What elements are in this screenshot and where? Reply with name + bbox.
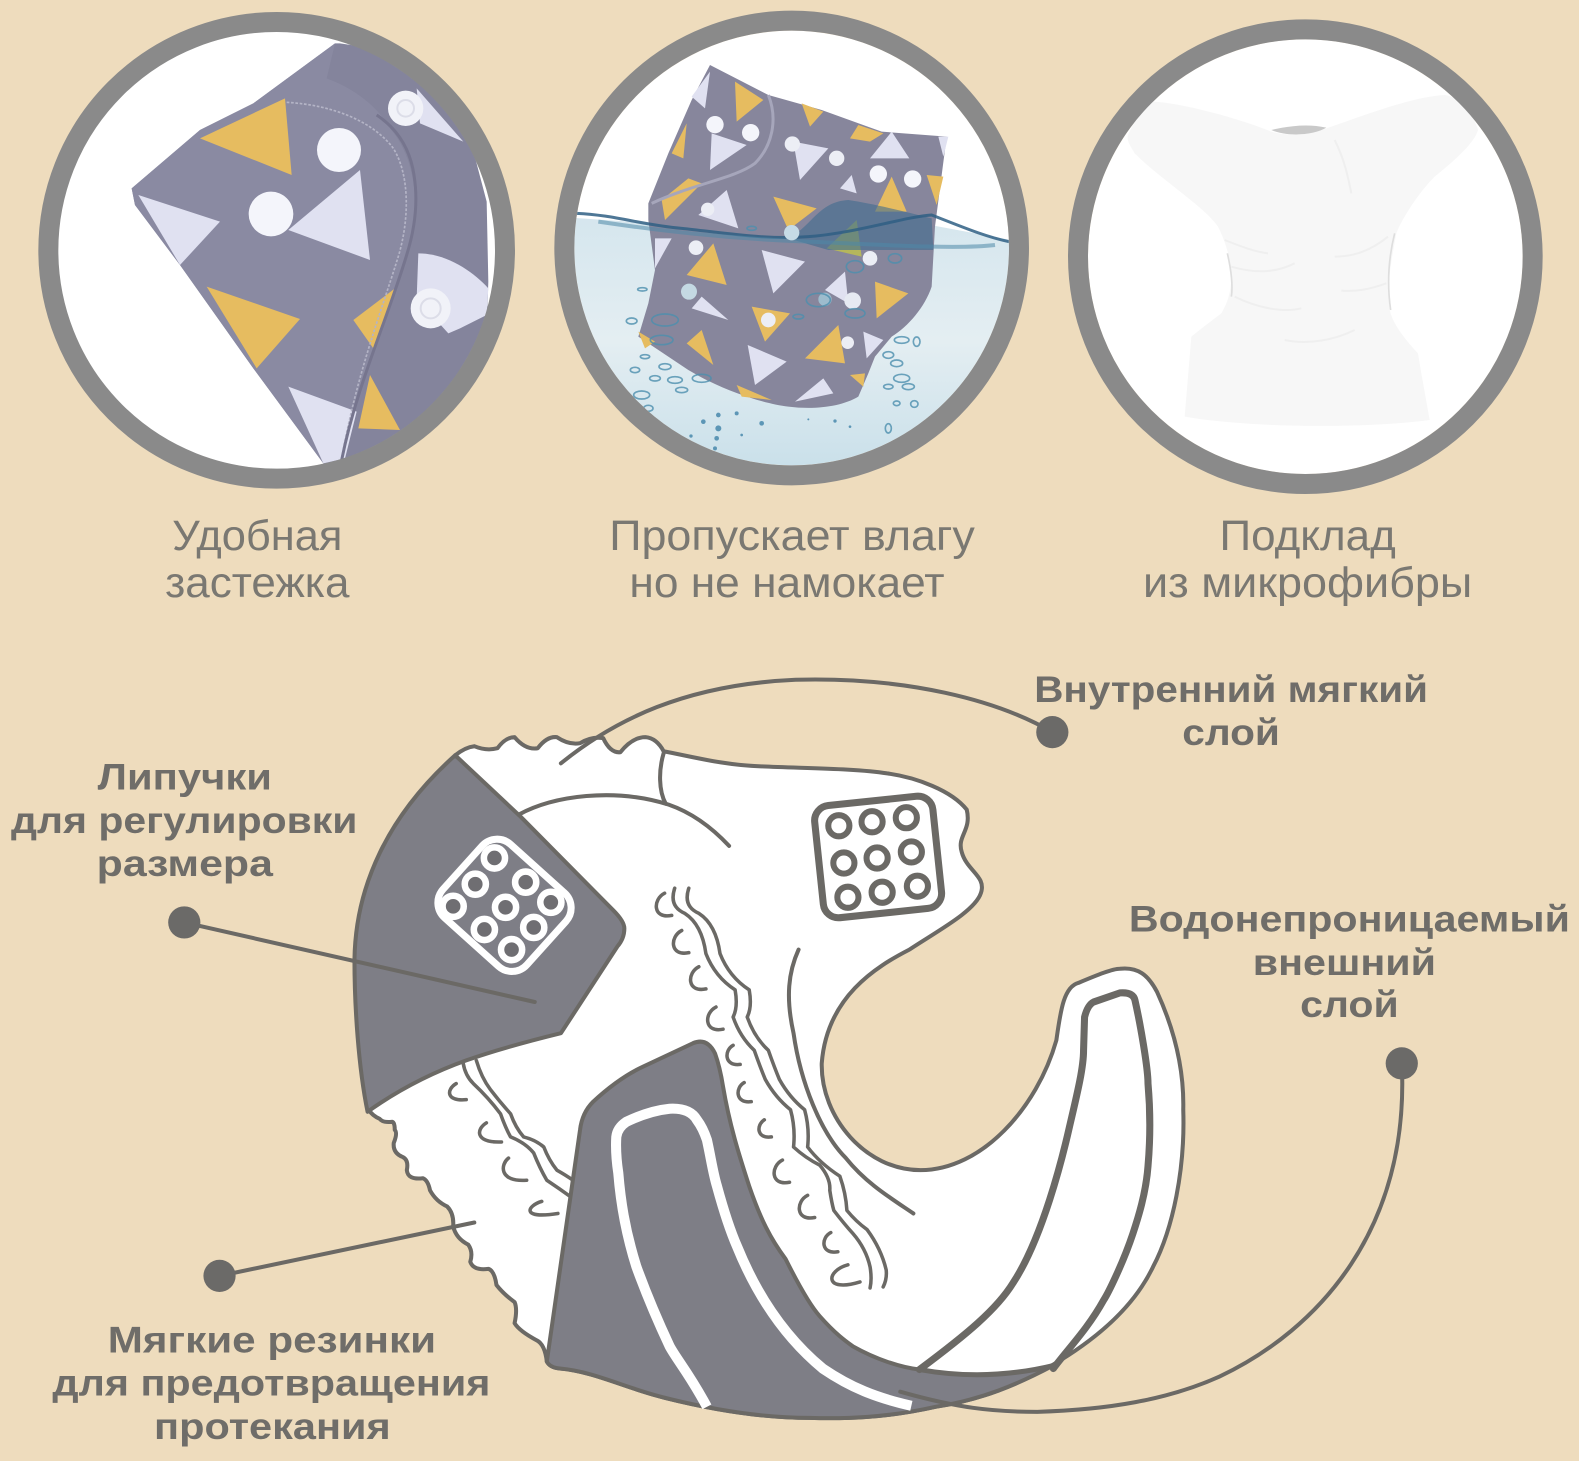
label: inner soft layer [1034,668,1428,753]
label: velcro size adjustment: для регулировки [11,799,357,841]
caption: convenient fastener [165,512,350,606]
snap panel on tab [430,831,579,980]
right leg thick seam [919,993,1150,1370]
grey crotch panel [547,1042,1053,1418]
diagram: diaper illustration [354,737,1183,1418]
label: soft elastics: протекания [154,1405,391,1447]
label: soft elastics: для предотвращения [52,1362,490,1404]
dot: elastic [203,1260,236,1292]
caption: microfibre liner [1143,512,1472,606]
caption: lets moisture through: но не намокает [629,559,945,606]
caption: microfibre liner: Подклад [1220,512,1396,559]
inner seam lines [519,753,913,1213]
snap panel on waist [813,795,943,919]
leader line: fastening tab [184,922,535,1002]
leader line: elastic [220,1223,474,1276]
leader line: outer layer [900,1063,1402,1412]
label: soft elastics [52,1318,490,1447]
label: waterproof outer layer: слой [1300,983,1399,1025]
label: velcro size adjustment [11,756,357,884]
panel: water resistance photo [555,21,1029,493]
diaper white body [369,737,1183,1418]
elastic stitching lower [450,1060,573,1215]
panel: snap fastener photo [48,22,505,482]
elastic stitching upper [656,888,886,1288]
dot: fastening tab [168,906,200,939]
label: velcro size adjustment: размера [97,842,273,884]
caption: convenient fastener: Удобная [172,512,342,559]
dot: outer layer [1386,1047,1418,1080]
white inset band [616,1109,911,1407]
caption: convenient fastener: застежка [165,559,350,606]
bottom seam arc [919,1366,1053,1375]
label: waterproof outer layer: Водонепроницаемый [1129,897,1570,939]
dot: inner layer [1036,716,1068,748]
panel: microfibre liner photo [1078,29,1533,484]
caption: lets moisture through [609,512,976,606]
grey fastening tab [354,755,624,1112]
caption: lets moisture through: Пропускает влагу [609,512,976,559]
label: inner soft layer: Внутренний мягкий [1034,668,1428,710]
label: inner soft layer: слой [1182,711,1280,753]
caption: microfibre liner: из микрофибры [1143,559,1472,606]
label: soft elastics: Мягкие резинки [108,1318,436,1360]
label: waterproof outer layer [1129,897,1570,1025]
leader line: inner layer [561,679,1052,763]
label: waterproof outer layer: внешний [1253,941,1436,983]
label: velcro size adjustment: Липучки [98,756,272,798]
